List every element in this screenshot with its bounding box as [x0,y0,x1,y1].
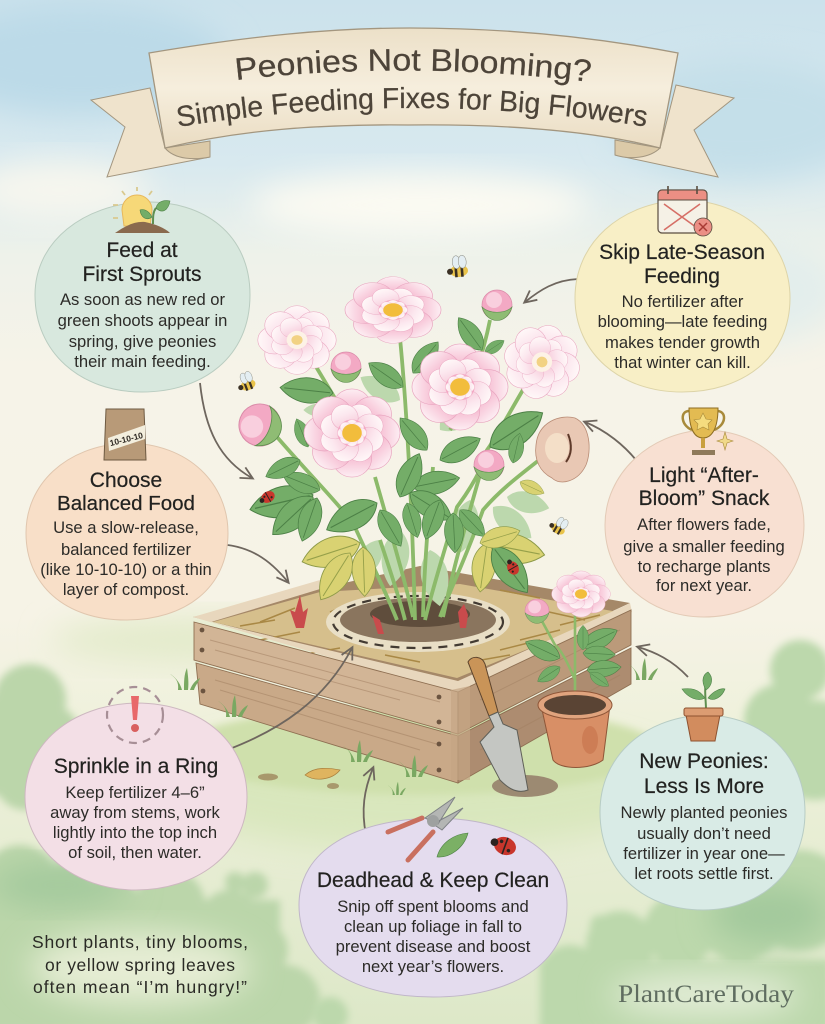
callout note [32,932,248,997]
flowers [258,306,336,374]
icon: fertilizer bag [104,409,146,460]
panel: feed at first sprouts [35,187,250,392]
fallen leaf and stones [305,768,340,779]
brand mark: PlantCareToday [618,981,795,1008]
icon: fertilizer bag: 10-10-10 [109,430,144,448]
panel: skip late-season feeding: blooming—late feeding [598,312,767,331]
panel: sprinkle in a ring: of soil, then water. [68,843,202,862]
faded bloom [536,417,589,482]
callout note: or yellow spring leaves [45,955,235,975]
panel: feed at first sprouts: As soon as new red or [60,290,226,309]
icon: ladybug [488,833,519,858]
panel: sprinkle in a ring: away from stems, work [50,803,221,822]
panel: skip late-season feeding: Feeding [644,265,720,288]
panel: after-bloom snack: Bloom” Snack [639,487,770,510]
foliage right [312,640,825,1024]
panel: sprinkle in a ring: lightly into the top inch [53,823,217,842]
panel: skip late-season feeding: makes tender growth [605,333,760,352]
banner title: Peonies Not Blooming? [236,48,591,86]
panel: new peonies: usually don’t need [637,824,771,843]
panel: new peonies: let roots settle first. [634,864,774,883]
red shoots in bed [290,595,468,634]
panel: deadhead and keep clean: next year’s flowers. [362,957,504,976]
grass tufts [170,668,200,690]
foliage left [0,664,320,1024]
panel: feed at first sprouts: green shoots appear in [58,311,227,330]
panel: deadhead and keep clean: clean up foliage in fall to [344,917,522,936]
icon: warning ring [107,687,163,743]
panel: skip late-season feeding: that winter can kill. [614,353,751,372]
trowel [468,657,528,791]
panel: deadhead and keep clean: prevent disease and boost [336,937,531,956]
panel: choose balanced food [26,409,228,620]
panel: after-bloom snack: give a smaller feeding [623,537,785,556]
callout note: often mean “I’m hungry!” [33,977,247,997]
panel: choose balanced food: layer of compost. [63,580,189,599]
panel: choose balanced food: Balanced Food [57,492,195,515]
rim [193,580,632,695]
mist patches [30,932,250,1004]
panel: new peonies: Newly planted peonies [621,803,787,822]
banner ribbon [90,27,735,178]
panel: after-bloom snack: for next year. [656,576,752,595]
panel: new peonies: New Peonies: [639,750,769,773]
panel: feed at first sprouts: their main feeding. [74,352,211,371]
panel: new peonies: fertilizer in year one— [623,844,785,863]
banner title: Simple Feeding Fixes for Big Flowers [178,86,647,126]
panel: sprinkle in a ring: Keep fertilizer 4–6” [65,783,205,802]
panel: skip late-season feeding: Skip Late-Season [599,241,765,264]
banner title [178,48,647,126]
potted peony [522,571,622,768]
panel: after-bloom snack: to recharge plants [638,557,770,576]
panel: feed at first sprouts: spring, give peonies [69,332,216,351]
icon: sun and sprout [113,187,170,233]
raised wooden garden bed [170,566,660,797]
bed interior [193,566,630,683]
panel: feed at first sprouts: First Sprouts [82,263,202,286]
panel: deadhead and keep clean [299,797,567,997]
panel: skip late-season feeding: No fertilizer after [622,292,744,311]
panel: sprinkle in a ring [25,687,247,890]
panel: choose balanced food: Choose [90,469,162,492]
front boards [194,622,458,734]
panel: after-bloom snack: After flowers fade, [637,515,771,534]
ground wash [160,730,680,850]
panel: deadhead and keep clean: Snip off spent blooms and [337,897,529,916]
panel: sprinkle in a ring: Sprinkle in a Ring [54,755,218,778]
icon: seedling pot [682,672,725,741]
panel: choose balanced food: balanced fertilizer [61,540,191,559]
arrows [200,279,688,835]
callout note: Short plants, tiny blooms, [32,932,248,952]
panel: choose balanced food: (like 10-10-10) or a thin [40,560,212,579]
peony plant [233,255,589,620]
panel: skip late-season feeding [575,186,790,392]
icon: crossed calendar [658,186,712,236]
terracotta pot [538,691,612,768]
panel: choose balanced food: Use a slow-release, [53,518,199,537]
icon: pruners [388,797,468,860]
panel: after-bloom snack: Light “After- [649,464,759,487]
panel: deadhead and keep clean: Deadhead & Keep Clean [317,869,549,892]
panel: feed at first sprouts: Feed at [106,239,178,262]
icon: trophy [683,408,733,455]
panel: after-bloom snack [605,408,804,617]
panel: new peonies [600,672,805,910]
panel: new peonies: Less Is More [644,775,764,798]
